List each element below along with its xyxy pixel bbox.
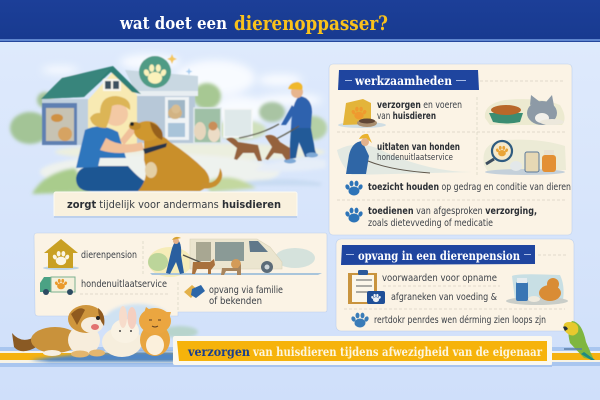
text: uitlaten van honden: uitlaten van honden <box>377 142 460 153</box>
illustration: van with dog walker <box>148 237 322 277</box>
caption: hero description: zorgt tijdelijk voor andermans huisdieren <box>67 199 281 211</box>
panel: opvangvormen <box>34 233 327 316</box>
text: van huisdieren: van huisdieren <box>377 111 436 122</box>
illustration: food bowl and cat <box>485 95 565 125</box>
hero illustration: pet sitter at animal shelter <box>10 54 327 194</box>
bottom banner: verzorgen <box>187 344 250 359</box>
rabbit <box>102 306 142 357</box>
left wing with kennels <box>42 99 88 145</box>
text: opvang via familie: opvang via familie <box>209 285 283 296</box>
building right wing <box>125 70 198 95</box>
icon: blue paw 3 <box>351 313 369 328</box>
bushes and ground <box>10 83 327 194</box>
icon: food bag and bowl <box>338 99 386 128</box>
icon: blue paw <box>345 181 363 196</box>
heading: opvang in een dierenpension: opvang in een dierenpension <box>358 249 520 263</box>
icon: parrot <box>563 321 595 360</box>
text: dierenpension: dierenpension <box>81 250 137 261</box>
animal in window <box>168 107 182 119</box>
building yellow centre <box>88 72 137 145</box>
header bar <box>0 0 600 42</box>
icon: clipboard with checklist <box>348 270 385 304</box>
text: zoals dietevveding of medicatie: zoals dietevveding of medicatie <box>368 218 493 229</box>
illustration: dog, rabbit and cat <box>12 304 198 362</box>
panel: opvang in een dierenpension <box>336 239 574 331</box>
two walked dogs <box>226 135 290 161</box>
bottom banner <box>173 336 552 367</box>
icon: paw sign <box>139 56 171 88</box>
text: rertdokr penrdes: rertdokr penrdes wen dérming zien loops zjn <box>374 315 546 326</box>
title: wat doet een <box>119 14 227 34</box>
icon: small green van <box>40 277 75 295</box>
text: toezicht houden: toezicht houden op gedrag en conditie van dieren <box>368 182 571 193</box>
illustration: pet with medicine jar <box>506 274 568 305</box>
illustration: walker with leash <box>337 134 472 175</box>
text: toedienen van afgesproken verzorging: toedienen van afgesproken verzorging, <box>368 206 537 217</box>
clouds and sky <box>42 54 322 124</box>
woman sitter <box>76 96 150 191</box>
heading: werkzaamheden: werkzaamheden <box>354 74 452 88</box>
text: verzorgen en voeren: verzorgen en voeren <box>377 100 462 111</box>
title <box>119 11 388 35</box>
dog <box>12 305 105 358</box>
icon: blue paw 2 <box>345 208 363 222</box>
teal roof <box>41 66 141 99</box>
caption: hero description <box>54 192 297 218</box>
dog walker <box>239 82 318 164</box>
text: voorwaarden voor opname: voorwaarden voor opname <box>382 273 497 284</box>
heading: opvang in een dierenpension <box>341 245 535 265</box>
golden dog <box>129 121 222 191</box>
heading: werkzaamheden <box>338 70 479 90</box>
bottom ribbon stripes <box>0 347 600 367</box>
illustration: magnifier and medicine jars <box>483 140 566 175</box>
text: afgraneken van voeding: afgraneken van voeding & <box>391 292 497 303</box>
icon: sparkles <box>167 54 177 64</box>
title: dierenoppasser? <box>234 11 388 35</box>
fence run with pets <box>194 108 221 143</box>
icon: handshake <box>184 285 205 298</box>
bottom banner: van huisdieren tijdens afwezigheid van de eigenaar <box>252 345 543 359</box>
text: hondenuitlaatservice label: hondenuitlaatservice <box>81 279 167 290</box>
icon: kennel house <box>43 239 79 270</box>
panel: werkzaamheden <box>329 64 572 235</box>
text: of bekenden: of bekenden <box>209 296 262 307</box>
cat <box>139 307 171 356</box>
text: hondenuitlaatservice: hondenuitlaatservice <box>377 153 453 163</box>
